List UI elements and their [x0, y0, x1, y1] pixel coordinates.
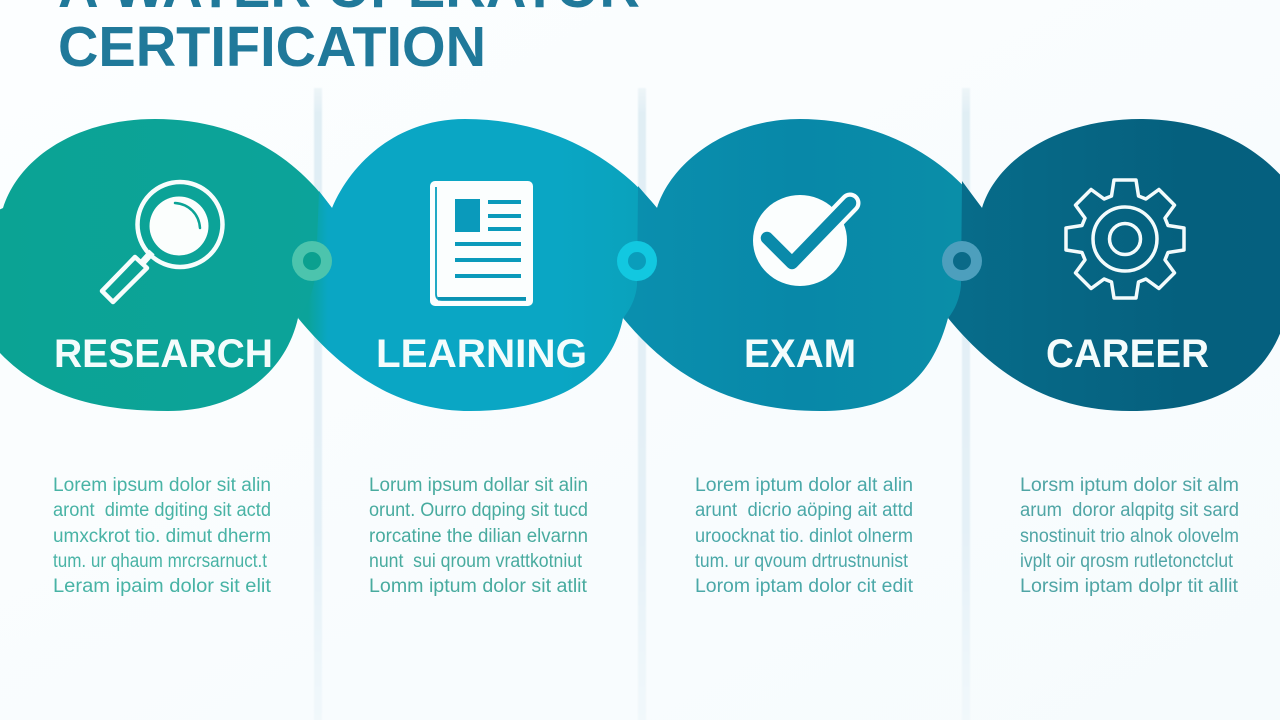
text block: learning: orunt. Ourro dqping sit tucd: [369, 500, 588, 521]
heading: exam: EXAM: [744, 332, 856, 376]
panel: exam: [623, 119, 983, 411]
connector dot 1: [292, 241, 332, 281]
career blob: [948, 119, 1280, 411]
text block: learning: rorcatine the dilian elvarnn: [369, 526, 588, 547]
text block: career: arum doror alqpitg sit sard: [1020, 500, 1239, 521]
text block: research: Leram ipaim dolor sit elit: [53, 576, 272, 597]
column dividers: [314, 88, 970, 720]
icon: check mark: [753, 195, 850, 286]
exam blob: [623, 119, 983, 411]
text block: learning: Lorum ipsum dollar sit alin: [369, 475, 588, 496]
text block: career: [1020, 475, 1239, 597]
title: CERTIFICATION: [58, 15, 486, 79]
learning blob: [298, 119, 658, 411]
panel: learning: [298, 119, 658, 411]
panel: research: [0, 119, 333, 411]
heading: career: CAREER: [1046, 332, 1209, 376]
text block: learning: nunt sui qroum vrattkotniut: [369, 551, 583, 572]
text block: learning: [369, 475, 588, 597]
title: [58, 0, 640, 79]
icon: newspaper: [430, 181, 533, 306]
text block: exam: uroocknat tio. dinlot olnerm: [695, 526, 913, 547]
text block: exam: [695, 475, 914, 597]
connector dot 3: [942, 241, 982, 281]
text block: research: umxckrot tio. dimut dherm: [53, 526, 271, 547]
text block: career: ivplt oir qrosm rutletonctclut: [1020, 551, 1234, 572]
icon: gear: [1066, 180, 1184, 298]
panel: career: [948, 119, 1280, 411]
text block: exam: Lorom iptam dolor cit edit: [695, 576, 914, 597]
text block: exam: arunt dicrio aöping ait attd: [695, 500, 913, 521]
text block: research: [53, 475, 272, 597]
text block: exam: tum. ur qvoum drtrustnunist: [695, 551, 909, 572]
text block: career: Lorsm iptum dolor sit alm: [1020, 475, 1239, 496]
heading: learning: LEARNING: [376, 332, 587, 376]
text block: exam: Lorem iptum dolor alt alin: [695, 475, 913, 496]
text block: learning: Lomm iptum dolor sit atlit: [369, 576, 588, 597]
text block: career: Lorsim iptam dolpr tit allit: [1020, 576, 1239, 597]
heading: research: RESEARCH: [54, 332, 273, 376]
text block: research: tum. ur qhaum mrcrsarnuct.t: [53, 551, 268, 572]
icon: magnifying glass: [102, 182, 222, 302]
research blob: [0, 119, 333, 411]
text block: research: aront dimte dgiting sit actd: [53, 500, 271, 521]
connector dot 2: [617, 241, 657, 281]
text block: research: Lorem ipsum dolor sit alin: [53, 475, 271, 496]
text block: career: snostinuit trio alnok olovelm: [1020, 526, 1239, 547]
